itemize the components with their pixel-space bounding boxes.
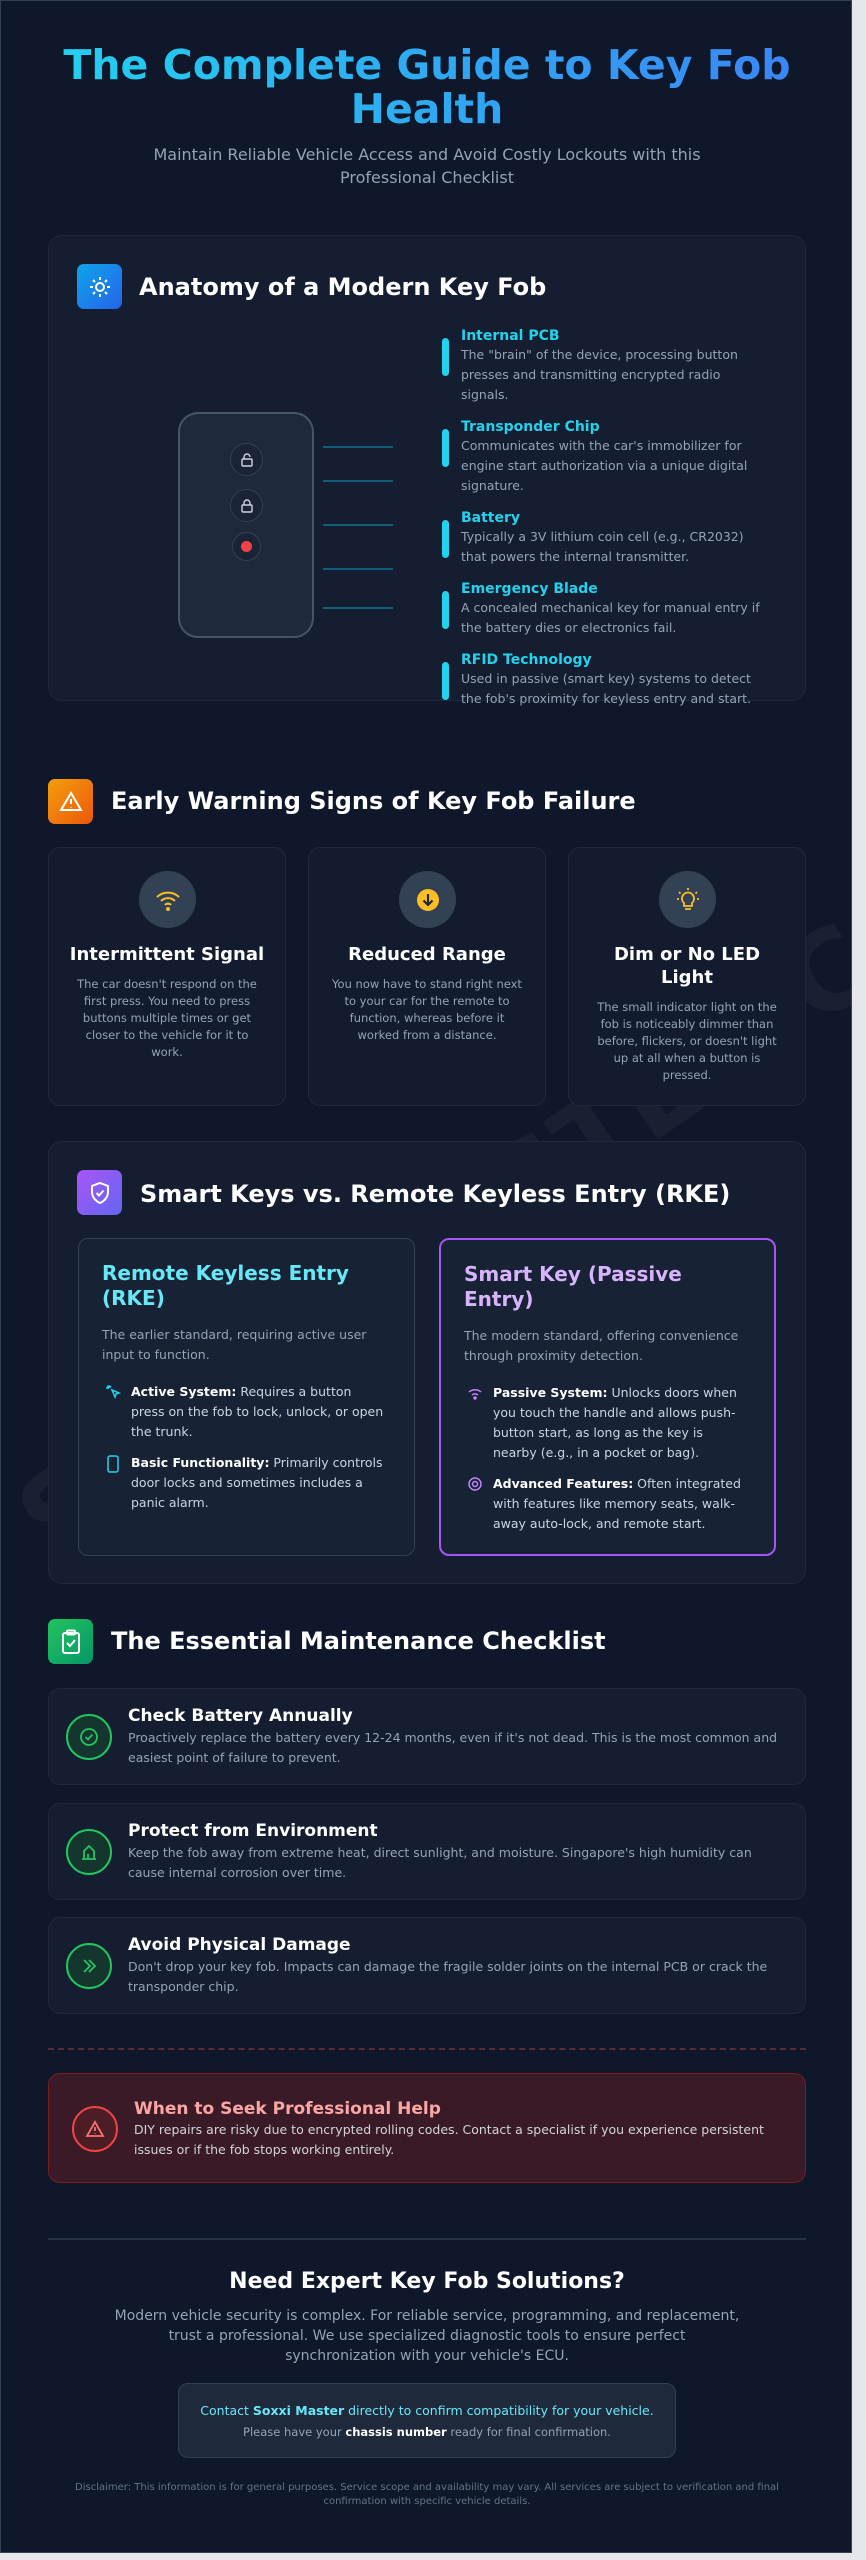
cta text: Modern vehicle security is complex. For reliable service, programming, and replacement, [115, 2308, 739, 2324]
callout: professional help [48, 2073, 806, 2183]
panel: anatomy [48, 235, 806, 701]
item: internal pcb [442, 328, 738, 402]
card: rke: Remote Keyless Entry (RKE) [102, 1261, 349, 1310]
heading: anatomy: Anatomy of a Modern Key Fob [139, 273, 546, 301]
bullet: passive system: Passive System: Unlocks doors when you touch the handle and allows push-button start, as long as the key is nearby (e.g., in a pocket or bag). [493, 1385, 737, 1460]
panel: anatomy: The "brain" of the device, processing button presses and transmitting encrypted radio signals. [461, 347, 738, 402]
cta text: synchronization with your vehicle's ECU. [285, 2348, 569, 2364]
icon: lock button [230, 489, 263, 522]
cta text [115, 2308, 739, 2364]
checklist: physical damage: Don't drop your key fob. Impacts can damage the fragile solder joints on the internal PCB or crack the transponder chip. [128, 1959, 767, 1994]
icon: panic button [232, 532, 261, 561]
heading: warning signs: Early Warning Signs of Key Fob Failure [111, 787, 636, 815]
icon: shield [77, 1170, 122, 1215]
subtitle: Maintain Reliable Vehicle Access and Avoid Costly Lockouts with this Professional Checklist [153, 145, 701, 187]
card: intermittent signal [48, 847, 286, 1106]
heading: smart keys: Smart Keys vs. Remote Keyless Entry (RKE) [140, 1180, 730, 1208]
heading: checklist: The Essential Maintenance Checklist [111, 1627, 606, 1655]
card: rke: The earlier standard, requiring active user input to function. [102, 1327, 366, 1362]
checklist: battery: Proactively replace the battery every 12-24 months, even if it's not dead. This is the most common and easiest point of failure to prevent. [128, 1730, 777, 1765]
icon: chip [77, 264, 122, 309]
item: emergency blade: Emergency Blade [461, 581, 598, 597]
icon: warning [48, 779, 93, 824]
card: intermittent signal: The car doesn't respond on the first press. You need to press buttons multiple times or get closer to the vehicle for it to work. [77, 977, 257, 1059]
checklist: environment: Keep the fob away from extreme heat, direct sunlight, and moisture. Singapore's high humidity can cause internal corrosion over time. [128, 1845, 752, 1880]
callout: professional help: DIY repairs are risky due to encrypted rolling codes. Contact a specialist if you experience persistent issues or if the fob stops working entirely. [134, 2122, 764, 2157]
card: reduced range: Reduced Range [348, 944, 506, 965]
card: rke [78, 1238, 415, 1556]
panel: smart keys vs rke [48, 1141, 806, 1584]
card: intermittent signal: Intermittent Signal [70, 944, 264, 965]
card: smart key [439, 1238, 776, 1556]
bullet: basic functionality: Basic Functionality: Primarily controls door locks and sometimes includes a panic alarm. [131, 1455, 382, 1510]
item: rfid: RFID Technology [461, 652, 592, 668]
checklist: battery: Check Battery Annually [128, 1706, 353, 1726]
disclaimer: Disclaimer: This information is for general purposes. Service scope and availability may vary. All services are subject to verification and final confirmation with specific vehicle details. [75, 2482, 779, 2507]
checklist: battery [48, 1688, 806, 1785]
cta text: trust a professional. We use specialized diagnostic tools to ensure perfect [169, 2328, 685, 2344]
icon: clipboard [48, 1619, 93, 1664]
panel: anatomy: Used in passive (smart key) systems to detect the fob's proximity for keyless entry and start. [461, 671, 751, 706]
item: rfid [442, 652, 751, 706]
card: dim led: Dim or No LED Light [614, 944, 760, 988]
contact box [178, 2383, 676, 2458]
title: The Complete Guide to Key Fob Health [63, 41, 791, 133]
connector lines [323, 446, 393, 609]
card: smart key: Smart Key (Passive Entry) [464, 1262, 682, 1311]
contact box: Contact Soxxi Master directly to confirm compatibility for your vehicle. [200, 2403, 654, 2418]
icon: alert [72, 2106, 118, 2152]
item: emergency blade [442, 581, 760, 635]
card: dim led [568, 847, 806, 1106]
fob illustration [178, 412, 314, 638]
checklist: physical damage [48, 1917, 806, 2014]
card: reduced range: You now have to stand right next to your car for the remote to function, whereas before it worked from a distance. [332, 977, 522, 1042]
card: smart key: The modern standard, offering convenience through proximity detection. [464, 1328, 738, 1363]
icon: unlock button [230, 443, 263, 476]
heading: cta: Need Expert Key Fob Solutions? [229, 2269, 625, 2294]
item: battery: Battery [461, 510, 520, 526]
item: transponder [442, 419, 747, 493]
panel: anatomy: A concealed mechanical key for manual entry if the battery dies or electronics fail. [461, 600, 760, 635]
panel: anatomy: Communicates with the car's immobilizer for engine start authorization via a unique digital signature. [461, 438, 747, 493]
checklist: environment: Protect from Environment [128, 1821, 378, 1841]
checklist: physical damage: Avoid Physical Damage [128, 1935, 351, 1955]
panel: anatomy: Typically a 3V lithium coin cell (e.g., CR2032) that powers the internal transmitter. [461, 529, 744, 564]
card: dim led: The small indicator light on the fob is noticeably dimmer than before, flickers, or doesn't light up at all when a button is pressed. [597, 1000, 777, 1082]
contact box: Please have your chassis number ready for final confirmation. [243, 2425, 611, 2439]
bullet: active system: Active System: Requires a button press on the fob to lock, unlock, or open the trunk. [131, 1384, 383, 1439]
item: internal pcb: Internal PCB [461, 328, 560, 344]
callout: professional help: When to Seek Professional Help [134, 2099, 441, 2119]
item: transponder: Transponder Chip [461, 419, 600, 435]
bullet: advanced features: Advanced Features: Often integrated with features like memory seats, walk-away auto-lock, and remote start. [493, 1476, 741, 1531]
item: battery [442, 510, 744, 564]
card: reduced range [308, 847, 546, 1106]
checklist: environment [48, 1803, 806, 1900]
